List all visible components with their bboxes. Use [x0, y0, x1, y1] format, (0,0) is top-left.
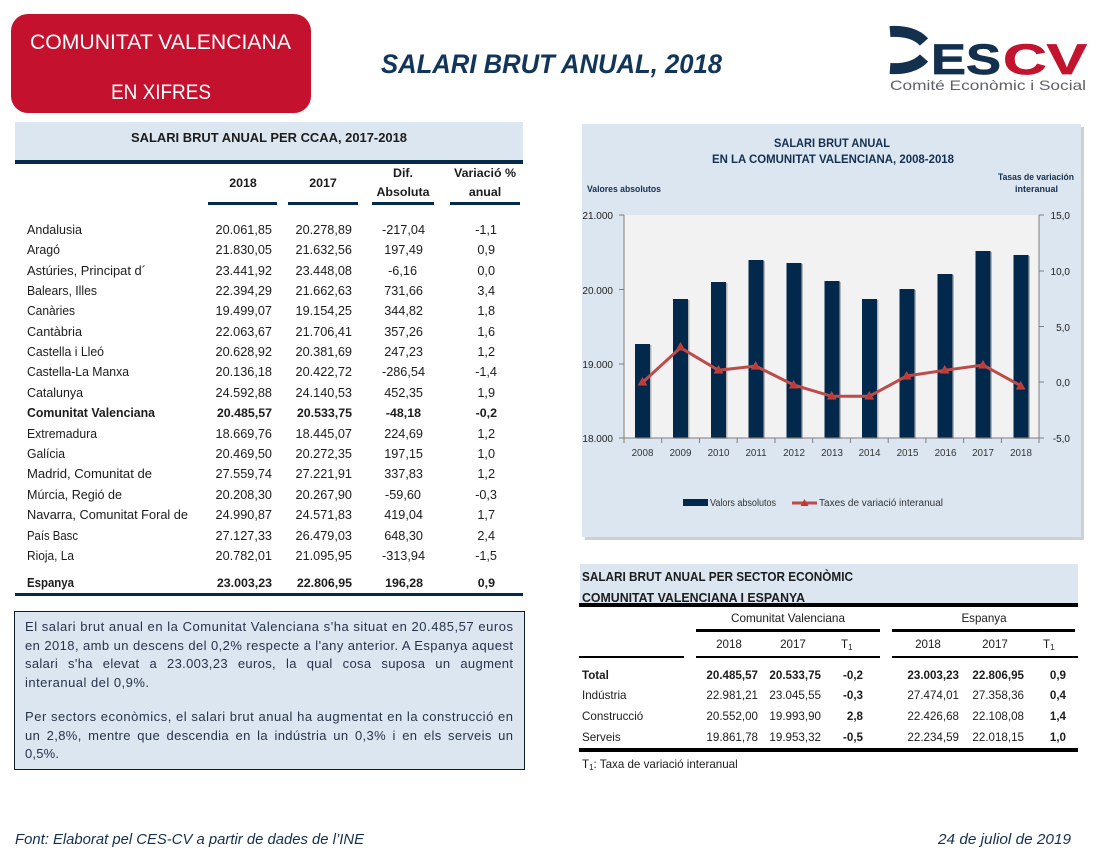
sector column headers: 2017 [780, 638, 806, 651]
table rows: 247,23 [384, 345, 423, 359]
table rows: 19.499,07 [216, 304, 272, 318]
table rows: 23.441,92 [216, 264, 272, 278]
table rows: 224,69 [384, 427, 423, 441]
table rows: 344,82 [384, 304, 423, 318]
plot area [624, 215, 1039, 438]
sector column headers: 2018 [915, 638, 941, 651]
line series [638, 343, 1025, 399]
x axis labels [632, 448, 1032, 459]
table rows [15, 223, 523, 596]
table rows: -0,3 [475, 488, 497, 502]
table rows: 24.140,53 [296, 386, 352, 400]
sector table note: 1 [589, 763, 594, 772]
table rows: 24.990,87 [216, 508, 272, 522]
sector rows: 19.953,32 [769, 731, 821, 744]
table rows: Rioja, La [27, 549, 75, 563]
axes [619, 215, 1044, 443]
table rows: 20.272,35 [296, 447, 352, 461]
sector rows: 22.806,95 [972, 669, 1025, 682]
left axis labels: 20.000 [582, 286, 613, 297]
panel: chart [582, 124, 1084, 540]
table rows: Aragó [27, 243, 60, 257]
table rows: 1,2 [477, 427, 495, 441]
x axis labels: 2016 [935, 448, 957, 459]
sector column headers: T [1043, 638, 1050, 651]
sector rows [579, 669, 1078, 752]
table rows: 20.267,90 [296, 488, 352, 502]
table rows: Extremadura [27, 427, 98, 441]
sector rows: 0,9 [1050, 669, 1067, 682]
table rows: 20.381,69 [296, 345, 352, 359]
table rows: 1,0 [477, 447, 495, 461]
logo: CES CV: ES [931, 36, 1001, 84]
left axis labels: 18.000 [582, 434, 613, 445]
table rows: -6,16 [388, 264, 417, 278]
logo: CES CV: CV [1003, 36, 1087, 84]
table rows: 20.278,89 [296, 223, 352, 237]
table rows: -286,54 [382, 365, 425, 379]
table rows: 18.669,76 [216, 427, 272, 441]
sector table heading [579, 564, 1078, 607]
logo: CES CV [890, 31, 1087, 93]
right axis labels [1051, 211, 1070, 445]
table rows: 0,9 [478, 576, 495, 590]
table rows: 357,26 [384, 325, 423, 339]
table rows: 648,30 [384, 529, 423, 543]
table rows: Galícia [27, 447, 66, 461]
axis titles: Tasas de variación [998, 172, 1074, 182]
text box: summary: El salari brut anual en la Comunitat Valenciana s'ha situat en 20.485,57 euros [25, 619, 514, 634]
panel: sector table [579, 564, 1078, 772]
table rows: 20.485,57 [217, 406, 272, 420]
table rows: 21.095,95 [296, 549, 352, 563]
axis titles: Valores absolutos [587, 184, 661, 194]
table rows: 26.479,03 [296, 529, 352, 543]
column headers [208, 166, 520, 205]
table rows: 196,28 [385, 576, 423, 590]
right axis labels: 5,0 [1056, 323, 1070, 334]
table rows: País Basc [27, 529, 79, 543]
x axis labels: 2015 [897, 448, 919, 459]
sector rows: 22.426,68 [907, 710, 959, 723]
table rows: 452,35 [384, 386, 423, 400]
legend [683, 498, 943, 509]
table rows: Navarra, Comunitat Foral de [27, 508, 188, 522]
table rows: 20.061,85 [216, 223, 272, 237]
text box: summary: interanual del 0,9%. [25, 675, 149, 690]
source note: Font: Elaborat pel CES-CV a partir de dades de l’INE [15, 831, 365, 848]
table rows: Andalusia [27, 223, 83, 237]
sector table note: T [582, 758, 589, 771]
chart title [712, 137, 955, 166]
table rows: -313,94 [382, 549, 425, 563]
table rows: 0,9 [477, 243, 495, 257]
table rows: 27.221,91 [296, 467, 352, 481]
left axis labels: 19.000 [582, 360, 613, 371]
sector rows: 22.018,15 [972, 731, 1024, 744]
table rows: Catalunya [27, 386, 84, 400]
table rows: -1,4 [475, 365, 497, 379]
sector rows: 19.993,90 [769, 710, 821, 723]
x axis labels: 2012 [783, 448, 805, 459]
panel: CCAA table [15, 122, 523, 596]
table rows: 21.706,41 [296, 325, 352, 339]
table rows: 20.136,18 [216, 365, 272, 379]
table rows: 23.003,23 [217, 576, 272, 590]
table rows: 22.806,95 [297, 576, 352, 590]
sector table heading: SALARI BRUT ANUAL PER SECTOR ECONÒMIC [582, 569, 853, 584]
sector rows: 27.474,01 [907, 689, 959, 702]
x axis labels: 2008 [632, 448, 654, 459]
table rows: 21.830,05 [216, 243, 272, 257]
x axis labels: 2014 [859, 448, 881, 459]
sector rows: 22.108,08 [972, 710, 1024, 723]
sector table heading: COMUNITAT VALENCIANA I ESPANYA [582, 591, 805, 605]
table rows: 731,66 [384, 284, 423, 298]
text box: summary [14, 612, 524, 770]
table rows: 18.445,07 [296, 427, 352, 441]
sector rows: 23.003,23 [907, 669, 960, 682]
sector rows: 22.234,59 [907, 731, 959, 744]
table rows: Castella i Lleó [27, 345, 104, 359]
chart title: EN LA COMUNITAT VALENCIANA, 2008-2018 [712, 153, 955, 166]
table heading: SALARI BRUT ANUAL PER CCAA, 2017-2018 [131, 131, 407, 145]
table rows: Castella-La Manxa [27, 365, 130, 379]
table rows: 24.571,83 [296, 508, 352, 522]
table rows: Madrid, Comunitat de [27, 467, 152, 481]
table rows: Canàries [27, 304, 75, 318]
table rows: 20.469,50 [216, 447, 272, 461]
sector rows: Construcció [582, 710, 643, 723]
column headers: Variació % [454, 166, 516, 180]
sector rows: 0,4 [1050, 689, 1067, 702]
sector column headers: 2017 [982, 638, 1008, 651]
table rows: Comunitat Valenciana [27, 406, 156, 420]
table rows: -48,18 [386, 406, 421, 420]
bars [635, 251, 1030, 439]
sector rows: 22.981,21 [706, 689, 758, 702]
table rows: 1,8 [477, 304, 495, 318]
table rows: 3,4 [477, 284, 495, 298]
column headers: 2017 [309, 176, 337, 190]
table rows: 1,2 [477, 467, 495, 481]
chart title: SALARI BRUT ANUAL [774, 137, 890, 150]
column headers: 2018 [229, 176, 257, 190]
table rows: Múrcia, Regió de [27, 488, 122, 502]
right axis labels: 15,0 [1051, 211, 1070, 222]
table rows: Cantàbria [27, 325, 83, 339]
table rows: -0,2 [476, 406, 497, 420]
sector rows: 2,8 [847, 710, 864, 723]
table rows: -217,04 [382, 223, 425, 237]
table rows: -1,5 [475, 549, 497, 563]
sector rows: -0,3 [843, 689, 864, 702]
table rows: 20.208,30 [216, 488, 272, 502]
sector rows: 1,0 [1050, 731, 1066, 744]
left axis labels [582, 211, 613, 445]
sector rows: Indústria [582, 689, 627, 702]
table rows: 0,0 [477, 264, 495, 278]
sector rows: -0,5 [843, 731, 864, 744]
title: SALARI BRUT ANUAL, 2018 [381, 49, 722, 79]
table rows: 21.632,56 [296, 243, 352, 257]
table rows: 24.592,88 [216, 386, 272, 400]
right axis labels: -5,0 [1053, 434, 1070, 445]
table rows: 419,04 [384, 508, 423, 522]
table rows: 197,49 [384, 243, 423, 257]
table rows: 1,6 [477, 325, 495, 339]
sector rows: 1,4 [1050, 710, 1067, 723]
table rows: 197,15 [384, 447, 423, 461]
sector rows: Total [582, 669, 609, 682]
sector rows: 19.861,78 [706, 731, 758, 744]
sector rows: 20.552,00 [706, 710, 758, 723]
table rows: 21.662,63 [296, 284, 352, 298]
date: 24 de juliol de 2019 [937, 831, 1072, 848]
sector column headers: Comunitat Valenciana [731, 612, 846, 625]
table rows: -59,60 [385, 488, 421, 502]
right axis labels: 0,0 [1056, 378, 1070, 389]
legend: Taxes de variació interanual [819, 498, 943, 509]
column headers: Absoluta [376, 185, 430, 199]
column headers: Dif. [393, 166, 413, 180]
table rows: 20.422,72 [296, 365, 352, 379]
x axis labels: 2009 [670, 448, 691, 459]
table rows: Astúries, Principat d´ [27, 264, 146, 278]
table rows: 22.063,67 [216, 325, 272, 339]
column headers: anual [469, 185, 501, 199]
sector rows: 20.485,57 [706, 669, 758, 682]
table rows: Balears, Illes [27, 284, 97, 298]
right axis labels: 10,0 [1051, 267, 1070, 278]
table rows: 22.394,29 [216, 284, 272, 298]
left axis labels: 21.000 [582, 211, 613, 222]
x axis labels: 2010 [708, 448, 730, 459]
table rows: 27.127,33 [216, 529, 272, 543]
table rows: 20.533,75 [297, 406, 352, 420]
text box: summary: 0,5%. [25, 746, 59, 761]
table rows: Espanya [27, 576, 75, 590]
table rows: 23.448,08 [296, 264, 352, 278]
x axis labels: 2011 [745, 448, 767, 459]
axis titles [587, 172, 1074, 194]
badge: Comunitat Valenciana en xifres: EN XIFRES [111, 81, 211, 104]
table rows: 1,9 [477, 386, 495, 400]
sector rows: 20.533,75 [769, 669, 822, 682]
table rows: 19.154,25 [296, 304, 352, 318]
sector column headers: 1 [848, 643, 853, 652]
logo: CES CV: Comité Econòmic i Social [890, 77, 1086, 93]
text box: summary: salari s'ha elevat a 23.003,23 euros, la qual cosa suposa un augment [25, 656, 513, 671]
text box: summary: Per sectors econòmics, el salari brut anual ha augmentat en la construcció en [25, 709, 513, 724]
sector column headers: T [841, 638, 848, 651]
table rows: -1,1 [475, 223, 497, 237]
text box: summary: en 2018, amb un descens del 0,2% respecte a l'any anterior. A Espanya aquest [25, 638, 513, 653]
badge: Comunitat Valenciana en xifres [11, 14, 311, 113]
sector rows: -0,2 [843, 669, 863, 682]
sector rows: 27.358,36 [972, 689, 1024, 702]
badge: Comunitat Valenciana en xifres: COMUNITAT VALENCIANA [30, 31, 291, 54]
table rows: 27.559,74 [216, 467, 272, 481]
table rows: 337,83 [384, 467, 423, 481]
sector rows: 23.045,55 [769, 689, 821, 702]
sector rows: Serveis [582, 731, 621, 744]
x axis labels: 2018 [1010, 448, 1032, 459]
table heading [15, 122, 523, 164]
table rows: 2,4 [477, 529, 495, 543]
x axis labels: 2017 [972, 448, 994, 459]
table rows: 1,7 [477, 508, 495, 522]
table rows: 1,2 [477, 345, 495, 359]
text box: summary: un 2,8%, mentre que descendia en la indústria un 0,3% i en els serveis un [25, 728, 513, 743]
sector table note: : Taxa de variació interanual [594, 758, 738, 771]
sector column headers: Espanya [961, 612, 1007, 625]
table rows: 20.782,01 [216, 549, 272, 563]
axis titles: interanual [1015, 184, 1058, 194]
sector column headers [579, 612, 1078, 658]
table rows: 20.628,92 [216, 345, 272, 359]
sector column headers: 1 [1050, 643, 1055, 652]
legend: Valors absolutos [710, 498, 776, 509]
sector column headers: 2018 [716, 638, 742, 651]
x axis labels: 2013 [821, 448, 843, 459]
